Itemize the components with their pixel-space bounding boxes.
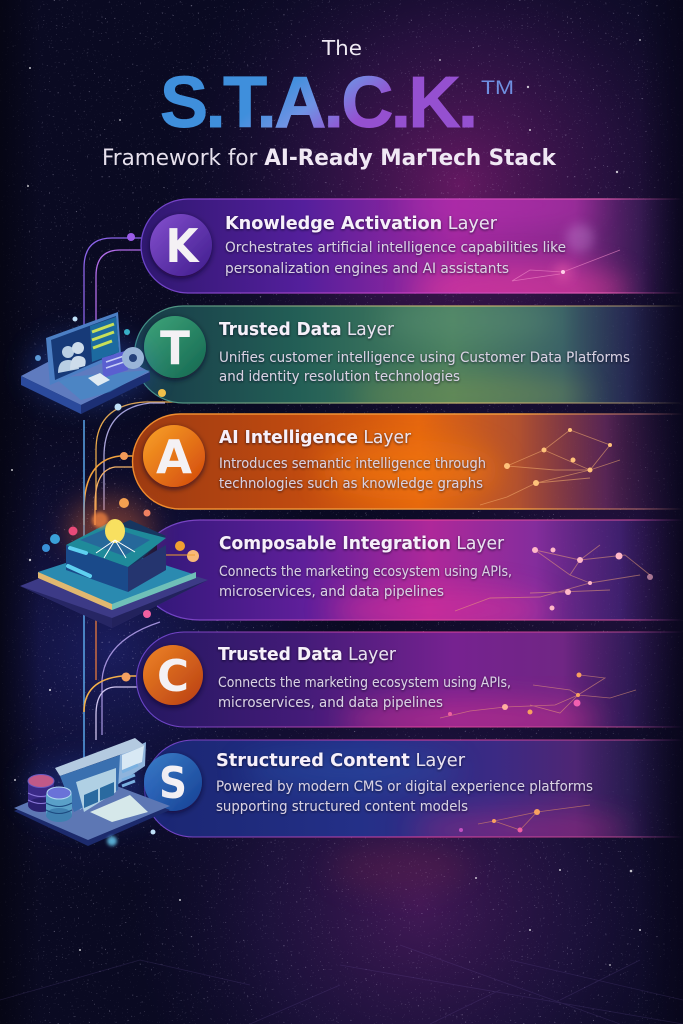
pill xyxy=(141,199,683,293)
pill edge xyxy=(157,520,683,620)
text: K: Orchestrates artificial intelligence capabilities like xyxy=(225,240,566,256)
pill xyxy=(137,632,683,727)
text: T xyxy=(219,319,630,385)
pill edge xyxy=(145,740,683,837)
pill glow xyxy=(330,588,550,632)
network lines xyxy=(455,545,653,611)
text: A: technologies such as knowledge graphs xyxy=(219,476,483,492)
badge A xyxy=(143,425,205,487)
badge K: K xyxy=(166,219,201,273)
text: C: Connects the marketing ecosystem using APIs, xyxy=(218,675,511,691)
text: Composable xyxy=(219,533,512,600)
pill xyxy=(157,520,683,620)
text: T: Unifies customer intelligence using Customer Data Platforms xyxy=(219,350,630,366)
network lines xyxy=(440,672,636,718)
text: T: and identity resolution technologies xyxy=(219,369,460,385)
badge A: A xyxy=(156,430,192,484)
badge T xyxy=(144,316,206,378)
pill edge xyxy=(141,199,683,293)
text: T: Trusted Data Layer xyxy=(219,319,395,340)
text: C: microservices, and data pipelines xyxy=(218,695,443,711)
pill xyxy=(145,740,683,837)
panel: Structured Content Layer xyxy=(144,740,683,846)
text: A: Introduces semantic intelligence through xyxy=(219,456,486,472)
badge S xyxy=(144,753,202,811)
panel: Trusted Data Layer (orange badge) xyxy=(136,632,680,728)
text: S: Powered by modern CMS or digital experience platforms xyxy=(216,779,593,795)
pill xyxy=(134,306,683,403)
text: Composable: Connects the marketing ecosystem using APIs, xyxy=(219,564,512,580)
text: Composable: microservices, and data pipelines xyxy=(219,584,444,600)
text: K: personalization engines and AI assistants xyxy=(225,261,509,277)
badge C xyxy=(143,645,203,705)
subtitle: Framework for AI-Ready MarTech Stack xyxy=(102,146,557,171)
title: S.T.A.C.K.: S.T.A.C.K. xyxy=(160,63,478,143)
trademark: TM xyxy=(481,78,514,99)
pill glow xyxy=(404,200,642,293)
text: A: AI Intelligence Layer xyxy=(219,427,412,448)
text: S: Structured Content Layer xyxy=(216,750,466,771)
text: K xyxy=(225,213,566,277)
badge K xyxy=(150,214,212,276)
pill glow xyxy=(353,307,587,402)
text: C: Trusted Data Layer xyxy=(218,644,397,665)
pill glow xyxy=(255,752,634,836)
pill edge xyxy=(134,306,683,403)
icon: AI intelligence platform xyxy=(20,498,208,628)
icon: customer data platform xyxy=(21,312,166,414)
text: Composable: Composable Integration Layer xyxy=(219,533,505,554)
network lines xyxy=(459,805,590,832)
pill edge xyxy=(132,414,683,509)
badge S: S xyxy=(159,758,187,809)
title block xyxy=(102,36,557,171)
pill glow xyxy=(340,700,600,740)
pill glow xyxy=(324,444,500,496)
panel: Knowledge Activation Layer xyxy=(140,198,680,294)
text: A xyxy=(219,427,486,492)
title: The: The xyxy=(321,36,362,60)
text: S xyxy=(216,750,593,815)
text: K: Knowledge Activation Layer xyxy=(225,213,498,234)
pill edge xyxy=(137,632,683,727)
icon: content and database platform xyxy=(14,738,170,846)
text: S: supporting structured content models xyxy=(216,799,468,815)
badge T: T xyxy=(160,321,191,375)
text: C xyxy=(218,644,511,711)
badge C: C xyxy=(157,651,189,702)
panel: AI Intelligence Layer xyxy=(132,414,683,509)
panel: Trusted Data Layer (green) xyxy=(134,305,680,404)
connector lines xyxy=(84,233,175,770)
network lines xyxy=(480,428,620,505)
pill xyxy=(132,414,683,509)
network glow xyxy=(512,224,620,281)
panel: Composable Integration Layer xyxy=(157,520,683,632)
